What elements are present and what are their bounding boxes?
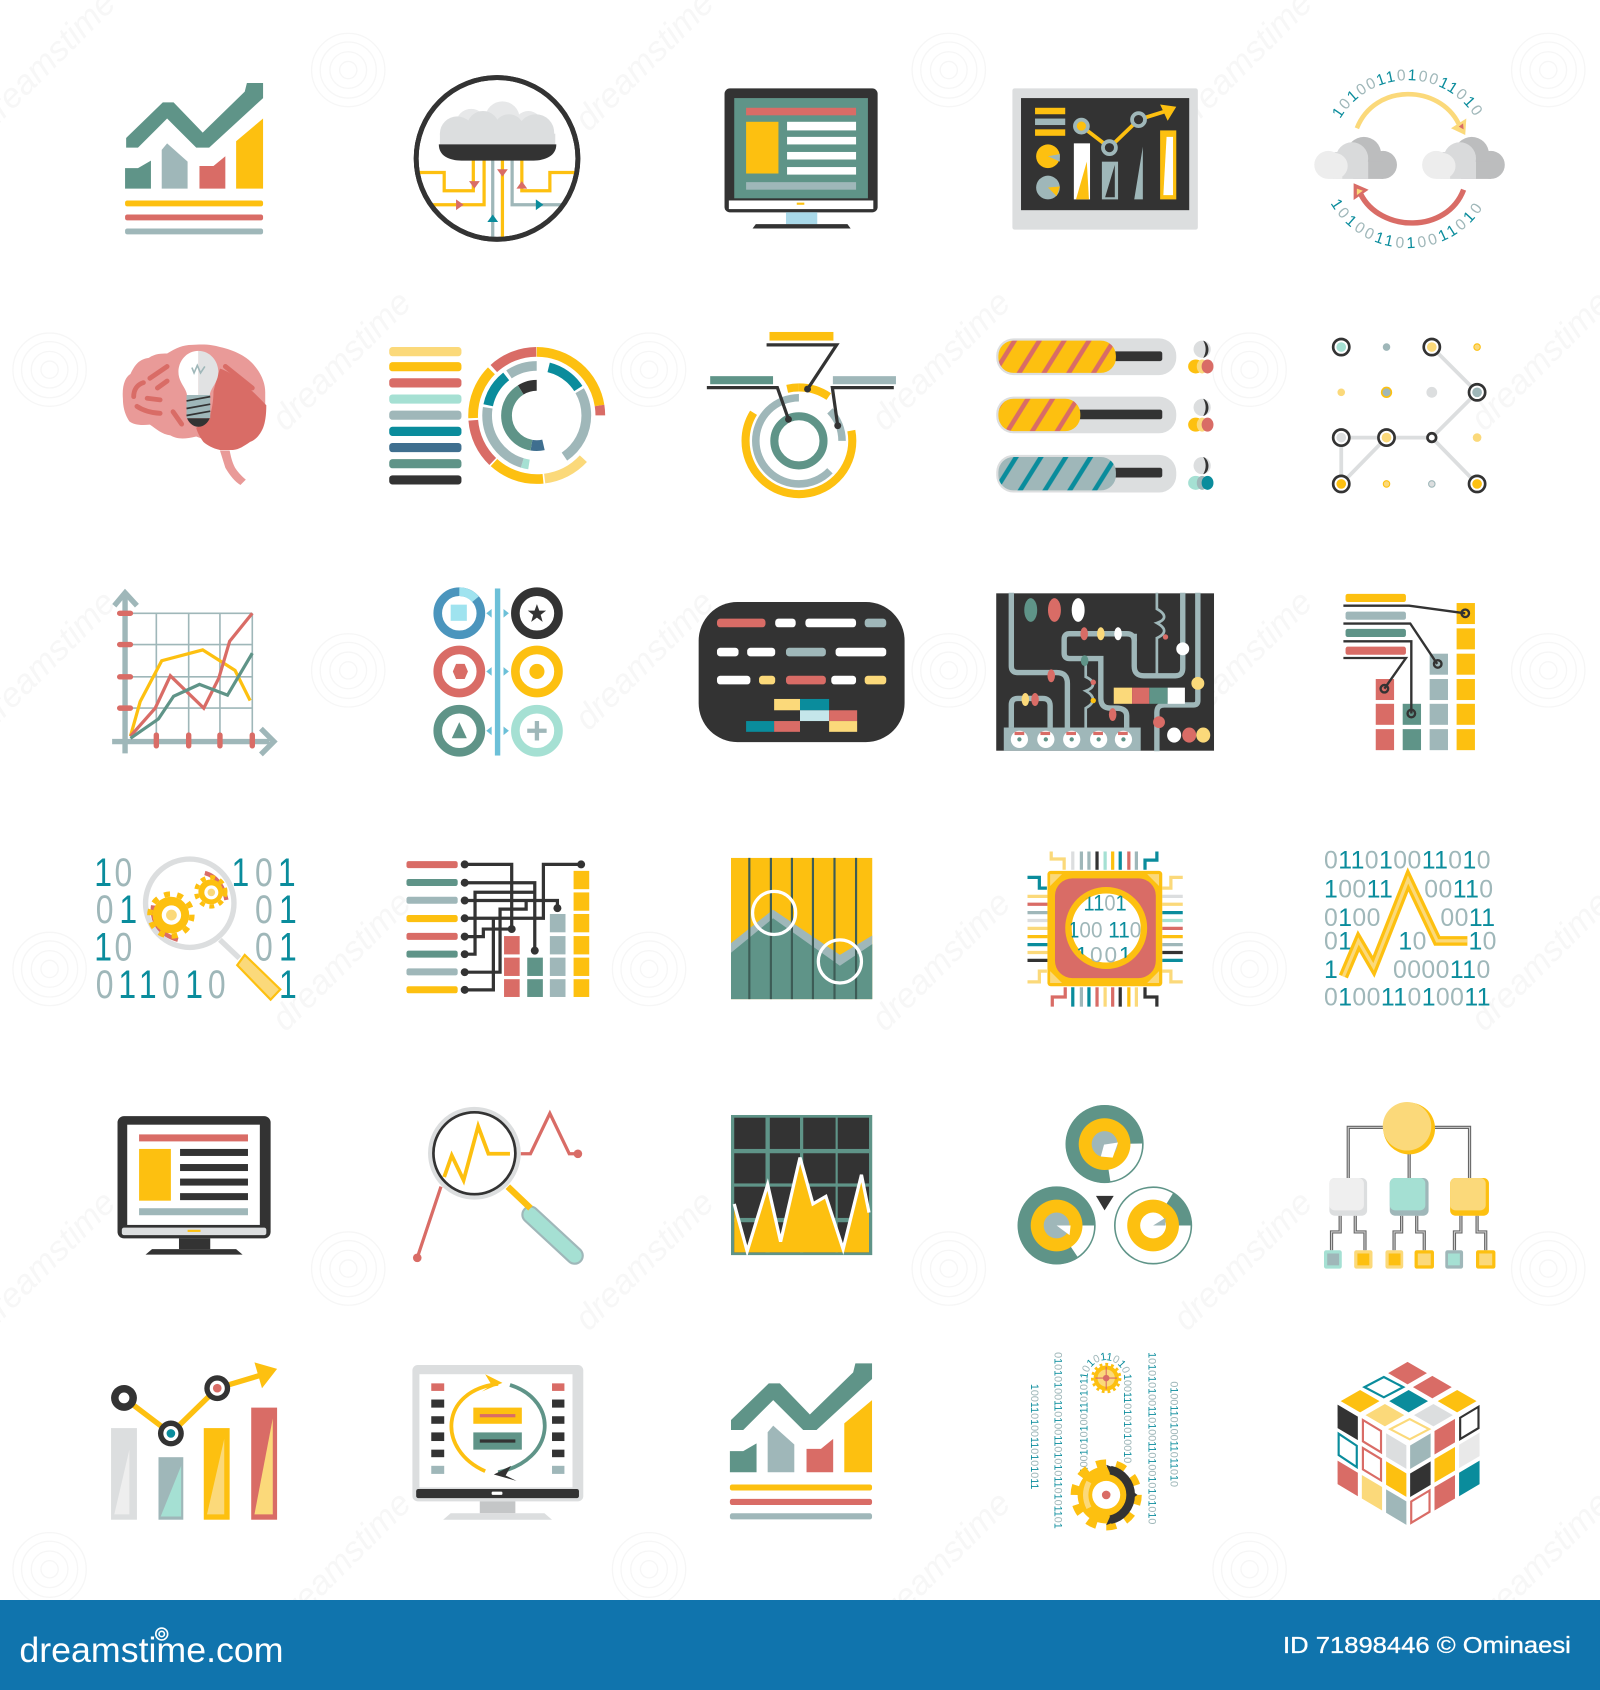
icon: binary digits with magnifier and gears (94, 850, 297, 1007)
icon: hierarchy of connected boxes (1324, 1102, 1495, 1269)
icon: gears with vertical binary columns: 1 0 1 0 1 0 1 00 11 0 1 00 11 0 1 00 1 0 1 0 1 0 1 0 (1146, 1352, 1158, 1524)
icon: processor chip with binary centre (1027, 851, 1183, 1007)
image credit: ID 71898446 © Ominaesi (1283, 1632, 1571, 1658)
icon: dark rounded code block (699, 602, 905, 742)
icon: dark monitor with white page (118, 1116, 271, 1255)
icon: binary digits with magnifier and gears: 1 (279, 962, 297, 1007)
icon: gears with vertical binary columns: 1 00 11 0 1 00 11 0 1 0 1 0 11 (1028, 1384, 1040, 1489)
icon: growth chart with arrow (second) (730, 1363, 872, 1519)
icon: brand spiral (156, 1628, 168, 1640)
icon: binary digits with magnifier and gears: 1 (119, 887, 137, 932)
icon: brain with light bulb (123, 344, 266, 485)
text: dreamstime (1166, 1184, 1320, 1338)
footer banner (0, 1600, 1600, 1690)
text: dreamstime (264, 884, 419, 1038)
icon: gears with vertical binary columns (1028, 1352, 1180, 1530)
icon: multi-line chart on axes (112, 593, 274, 754)
text: dreamstime (864, 1484, 1018, 1639)
icon: binary matrix with zigzag line: 010011010011 (1324, 985, 1491, 1012)
text: dreamstime (264, 284, 419, 438)
icon: binary digits with magnifier and gears: 0 (96, 887, 113, 932)
icon: network node graph (1333, 339, 1485, 492)
icon: binary digits with magnifier and gears: 1 (232, 850, 249, 895)
icon: binary digits with magnifier and gears: 1 (279, 924, 297, 969)
icon: binary matrix with zigzag line: 10011 (1324, 876, 1393, 903)
icon: processor chip with binary centre: 100 110 (1068, 918, 1141, 943)
icon: desktop monitor with teal page (725, 88, 878, 228)
icon: area chart with circled points (731, 858, 872, 999)
icon: cloud with circuit wires in circle (416, 78, 578, 241)
icon: isometric colour cube (1338, 1362, 1480, 1525)
icon: binary digits with magnifier and gears: 0 (115, 850, 132, 895)
icon: stacked bars with segmented ring chart (389, 347, 600, 484)
icon: gears with vertical binary columns: 0 1 0 1 0 1 00 11 0 1 00 11 0 1 0 1 0 11 0 1 0 11 0 1 (1051, 1352, 1063, 1529)
icon: bar chart with rising arrow (111, 1362, 277, 1520)
text: dreamstime (864, 284, 1018, 438)
icon: binary matrix with zigzag line: 1 (1324, 957, 1338, 984)
icon: binary matrix with zigzag line: 0011 (1440, 905, 1495, 932)
icon: three sliders with user markers (996, 338, 1213, 493)
text: dreamstime (1166, 583, 1320, 738)
icon: binary digits with magnifier and gears: 0 (255, 887, 273, 932)
icon: binary digits with magnifier and gears: 1 (139, 962, 157, 1007)
icon: circuit board (996, 593, 1214, 751)
icon: processor chip with binary centre: 1101 (1084, 891, 1127, 916)
icon: binary matrix with zigzag line: 0100 (1324, 905, 1381, 932)
icon: binary matrix with zigzag line: 10 (1398, 929, 1427, 956)
icon: dashboard tablet with bar charts (1012, 88, 1198, 230)
icon: binary digits with magnifier and gears: 0 (255, 850, 273, 895)
icon: gears with vertical binary columns: 0 1 00 11 0 1 00 11 0 11 0 1 0 (1168, 1381, 1180, 1487)
icon: binary matrix with zigzag line: 10 (1468, 929, 1497, 956)
icon: binary digits with magnifier and gears: 1 (94, 850, 112, 895)
icon: binary digits with magnifier and gears: 1 (185, 962, 203, 1007)
icon: binary digits with magnifier and gears: 0 (96, 962, 113, 1007)
icon: binary matrix with zigzag line: 01 (1324, 929, 1352, 956)
icon: binary matrix with zigzag line (1324, 848, 1497, 1012)
icon: ring with three callout labels (707, 332, 896, 494)
icon: binary digits with magnifier and gears: 0 (208, 962, 226, 1007)
icon: binary digits with magnifier and gears: 1 (279, 887, 297, 932)
icon: clouds syncing with binary rings: 1010011010011010 (1331, 200, 1481, 248)
icon: growth chart with arrow (125, 83, 263, 234)
text: dreamstime (567, 583, 722, 738)
icon: data bars wired to column chart (406, 860, 589, 997)
icon: clouds syncing with binary rings: 1010011010011010 (1333, 70, 1482, 118)
text: dreamstime (264, 1484, 419, 1639)
icon: binary digits with magnifier and gears: 1 (278, 850, 296, 895)
icon: light monitor with refresh arrows (412, 1365, 583, 1520)
icon: gears with vertical binary columns: 1001010100110101101011010 1 00 11 0 1 0 1 0 1 00 1 0 (1080, 1352, 1132, 1471)
icon: binary digits with magnifier and gears: 1 (94, 924, 112, 969)
icon: bar columns with callout lines (1343, 594, 1475, 750)
icon: clouds syncing with binary rings (1314, 70, 1505, 248)
icon: binary matrix with zigzag line: 011010011010 (1324, 848, 1491, 875)
icon: binary matrix with zigzag line: 0000110 (1393, 957, 1491, 984)
icon: binary digits with magnifier and gears: 0 (115, 924, 132, 969)
icon: binary digits with magnifier and gears: 1 (118, 962, 136, 1007)
icon: three donut charts (1018, 1105, 1191, 1264)
icon: binary digits with magnifier and gears: 0 (162, 962, 180, 1007)
text: dreamstime (864, 884, 1018, 1038)
icon: magnifier over line chart (413, 1110, 582, 1262)
icon: processor chip with binary centre: 1001 (1075, 942, 1132, 967)
brand wordmark: dreamstime.com (19, 1630, 284, 1670)
icon: binary matrix with zigzag line: 00110 (1424, 876, 1494, 903)
icon: six shape rings on divider (438, 588, 558, 756)
icon: binary digits with magnifier and gears: 0 (255, 924, 273, 969)
icon: dark grid with yellow spike chart (731, 1115, 872, 1255)
text: dreamstime (567, 1184, 722, 1338)
